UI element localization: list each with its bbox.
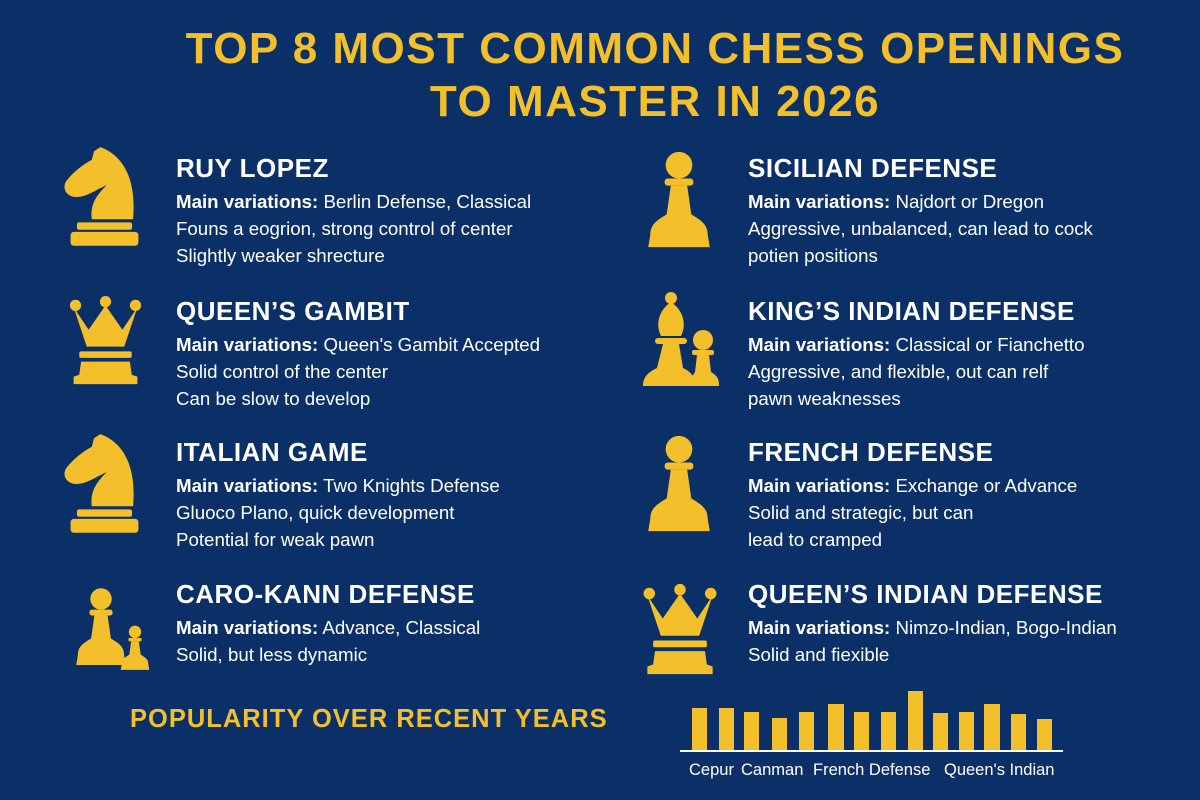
section: king's indian: Aggressive, and flexible, out can relf: [748, 361, 1048, 382]
bar chart: French Defense: [813, 761, 930, 779]
bar chart: Canman: [741, 761, 803, 779]
section: king's indian: KING’S INDIAN DEFENSE: [748, 296, 1075, 326]
section: queen's indian: [748, 579, 1117, 665]
section: french: Main variations: Exchange or Advance: [748, 475, 1077, 496]
section: italian game: Potential for weak pawn: [176, 529, 374, 550]
section: caro-kann: Solid, but less dynamic: [176, 644, 367, 665]
title: TOP 8 MOST COMMON CHESS OPENINGS: [186, 24, 1124, 73]
section: ruy lopez: RUY LOPEZ: [176, 153, 329, 183]
section: italian game: [176, 437, 500, 550]
icon: pawn french: [648, 436, 710, 531]
icon: pawns caro-kann: [76, 588, 149, 670]
icon: queen queen's indian: [644, 584, 716, 674]
section: caro-kann: Main variations: Advance, Classical: [176, 617, 480, 638]
section: ruy lopez: Main variations: Berlin Defense, Classical: [176, 191, 531, 212]
section: italian game: Main variations: Two Knights Defense: [176, 475, 500, 496]
section: italian game: Gluoco Plano, quick development: [176, 502, 454, 523]
bar chart: Cepur: [689, 761, 734, 779]
section: italian game: ITALIAN GAME: [176, 437, 368, 467]
section: king's indian: [748, 296, 1084, 409]
section: ruy lopez: Founs a eogrion, strong control of center: [176, 218, 513, 239]
section: queen's gambit: Can be slow to develop: [176, 388, 370, 409]
section: caro-kann: CARO-KANN DEFENSE: [176, 579, 475, 609]
icon: queen queen's gambit: [70, 296, 141, 384]
section: king's indian: Main variations: Classical or Fianchetto: [748, 334, 1084, 355]
section: sicilian: SICILIAN DEFENSE: [748, 153, 997, 183]
section: french: lead to cramped: [748, 529, 882, 550]
section: queen's gambit: [176, 296, 540, 409]
title: TO MASTER IN 2026: [430, 77, 880, 126]
section: ruy lopez: [176, 153, 531, 266]
icon: pawn sicilian: [648, 152, 710, 247]
bar chart: [680, 691, 1063, 779]
icon: knight ruy lopez: [64, 147, 138, 246]
section: sicilian: potien positions: [748, 245, 878, 266]
section: french: [748, 437, 1077, 550]
icon: bishop and pawn king's indian: [643, 292, 719, 386]
icon: knight italian: [64, 434, 138, 533]
bar chart: Queen's Indian: [944, 761, 1054, 779]
section: french: Solid and strategic, but can: [748, 502, 973, 523]
section: sicilian: Aggressive, unbalanced, can lead to cock: [748, 218, 1093, 239]
section: queen's indian: QUEEN’S INDIAN DEFENSE: [748, 579, 1103, 609]
section: ruy lopez: Slightly weaker shrecture: [176, 245, 385, 266]
section: sicilian: Main variations: Najdort or Dregon: [748, 191, 1044, 212]
section: queen's gambit: QUEEN’S GAMBIT: [176, 296, 410, 326]
section: queen's indian: Solid and fiexible: [748, 644, 889, 665]
section: king's indian: pawn weaknesses: [748, 388, 901, 409]
section: queen's gambit: Solid control of the center: [176, 361, 388, 382]
section: queen's indian: Main variations: Nimzo-Indian, Bogo-Indian: [748, 617, 1117, 638]
chart heading: POPULARITY OVER RECENT YEARS: [130, 705, 608, 733]
section: french: FRENCH DEFENSE: [748, 437, 993, 467]
section: queen's gambit: Main variations: Queen's Gambit Accepted: [176, 334, 540, 355]
title: [186, 24, 1124, 126]
section: sicilian: [748, 153, 1093, 266]
section: caro-kann: [176, 579, 480, 665]
